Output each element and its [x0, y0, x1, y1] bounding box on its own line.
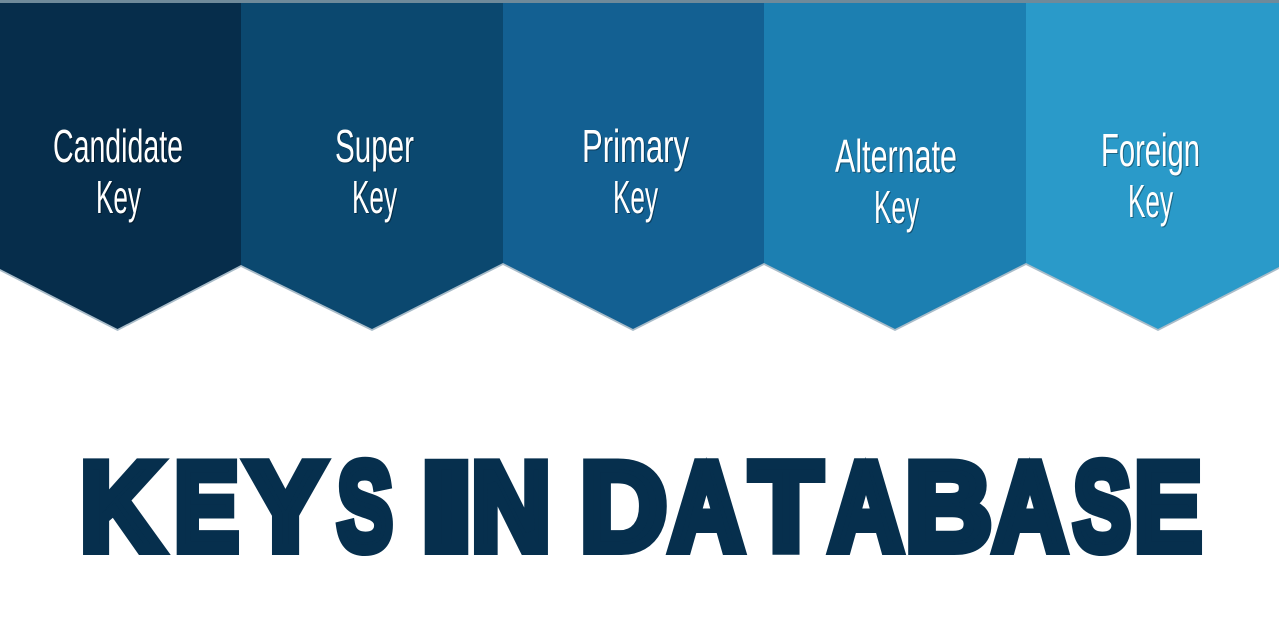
title: S [338, 438, 392, 576]
panel: alternate key: Key [874, 181, 919, 233]
title: E [174, 438, 238, 576]
panel: foreign key: Key [1128, 175, 1173, 227]
title: T [750, 438, 822, 576]
title [80, 438, 1202, 576]
panel: super key: Key [352, 171, 397, 223]
panel: primary key: Key [613, 171, 658, 223]
title: N [472, 438, 550, 576]
title: I [420, 438, 472, 576]
panel: super key: Super [335, 120, 414, 172]
title: E [1134, 438, 1202, 576]
panel: foreign key: Foreign [1101, 124, 1200, 176]
title: K [80, 438, 162, 576]
title: D [580, 438, 666, 576]
panel: primary key: Primary [582, 120, 689, 172]
panel: super key [241, 3, 503, 331]
title: B [906, 438, 992, 576]
panel: alternate key: Alternate [835, 130, 957, 182]
panel: candidate key: Key [96, 171, 141, 223]
title: A [830, 438, 902, 576]
panel: foreign key [1026, 3, 1279, 331]
top strip [0, 0, 1279, 3]
title: Y [246, 438, 324, 576]
title: S [1074, 438, 1130, 576]
panel: primary key [503, 3, 764, 331]
title: A [994, 438, 1066, 576]
title: A [670, 438, 744, 576]
panel: alternate key [764, 3, 1026, 331]
panel: candidate key [0, 3, 241, 331]
panel: candidate key: Candidate [53, 120, 183, 172]
